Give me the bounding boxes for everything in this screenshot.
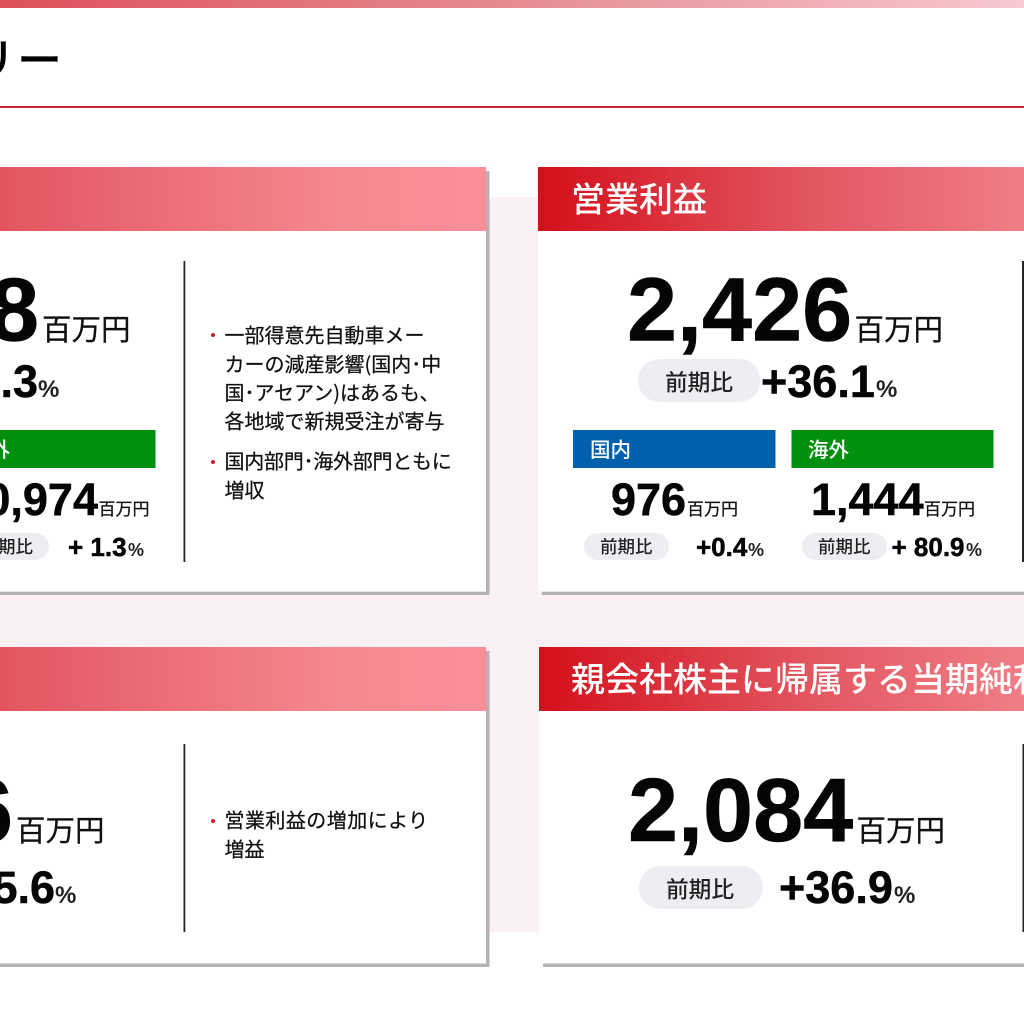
main value [0, 260, 131, 360]
main value: 2,084 [628, 761, 853, 861]
year-on-year change: % [876, 376, 897, 403]
overseas block: 百万円 [924, 500, 975, 519]
overseas change: + 1.3 [68, 532, 127, 562]
panel: top right (operating profit) [538, 167, 1024, 595]
main value: 百万円 [16, 815, 105, 848]
domestic block: +0.4 [696, 532, 748, 562]
panel heading: 営業利益 [571, 172, 707, 222]
commentary bullets: カーの減産影響(国内･中 [224, 348, 441, 378]
domestic block [573, 430, 776, 562]
domestic block: % [748, 540, 764, 560]
main value: 百万円 [856, 815, 945, 848]
year-on-year change [639, 862, 915, 913]
year-on-year change: .3 [0, 356, 38, 407]
title underline [0, 106, 1024, 108]
commentary bullets: 営業利益の増加により [224, 804, 429, 834]
overseas change: % [128, 540, 144, 560]
year-on-year change [638, 356, 897, 407]
year-on-year change: +36.1 [761, 356, 875, 407]
commentary bullets: 増収 [224, 474, 264, 504]
overseas block: + 80.9 [892, 532, 965, 562]
commentary bullets: 国内部門･海外部門ともに [224, 446, 452, 474]
main value: 百万円 [42, 314, 131, 347]
panel: bottom right (net profit) [539, 647, 1024, 967]
overseas tag [0, 430, 156, 468]
panel: top left (revenue) [0, 167, 490, 595]
domestic block: 前期比 [600, 534, 653, 559]
overseas block: 前期比 [818, 534, 871, 559]
domestic block: 国内 [590, 433, 631, 463]
overseas value [0, 474, 150, 525]
pale pink background band [0, 197, 1024, 932]
commentary bullets: 一部得意先自動車メー [224, 320, 424, 348]
domestic block: 976 [611, 474, 686, 525]
year-on-year change: 前期比 [665, 364, 733, 398]
main value [0, 762, 105, 862]
year-on-year change [0, 356, 59, 407]
main value: 2,426 [627, 260, 852, 360]
commentary bullets [211, 804, 429, 862]
commentary bullets: 各地域で新規受注が寄与 [224, 406, 444, 434]
domestic block: 百万円 [687, 500, 738, 519]
page title: ー [17, 24, 62, 89]
panel: bottom left (ordinary profit) [0, 647, 490, 967]
year-on-year change: % [894, 882, 915, 909]
main value: 百万円 [854, 314, 943, 347]
year-on-year change: % [55, 882, 76, 909]
overseas change [0, 532, 144, 562]
overseas value: 百万円 [98, 500, 150, 519]
year-on-year change: 前期比 [666, 872, 734, 904]
commentary bullets: 国･アセアン)はあるも、 [224, 377, 439, 406]
top gradient bar [0, 0, 1024, 8]
year-on-year change: +36.9 [779, 862, 893, 913]
overseas block: % [966, 540, 982, 560]
commentary bullets [211, 320, 452, 504]
overseas block: 海外 [808, 433, 849, 463]
overseas block [792, 430, 994, 562]
commentary bullets: 増益 [224, 834, 264, 862]
year-on-year change: % [38, 376, 59, 403]
overseas block: 1,444 [811, 474, 924, 525]
